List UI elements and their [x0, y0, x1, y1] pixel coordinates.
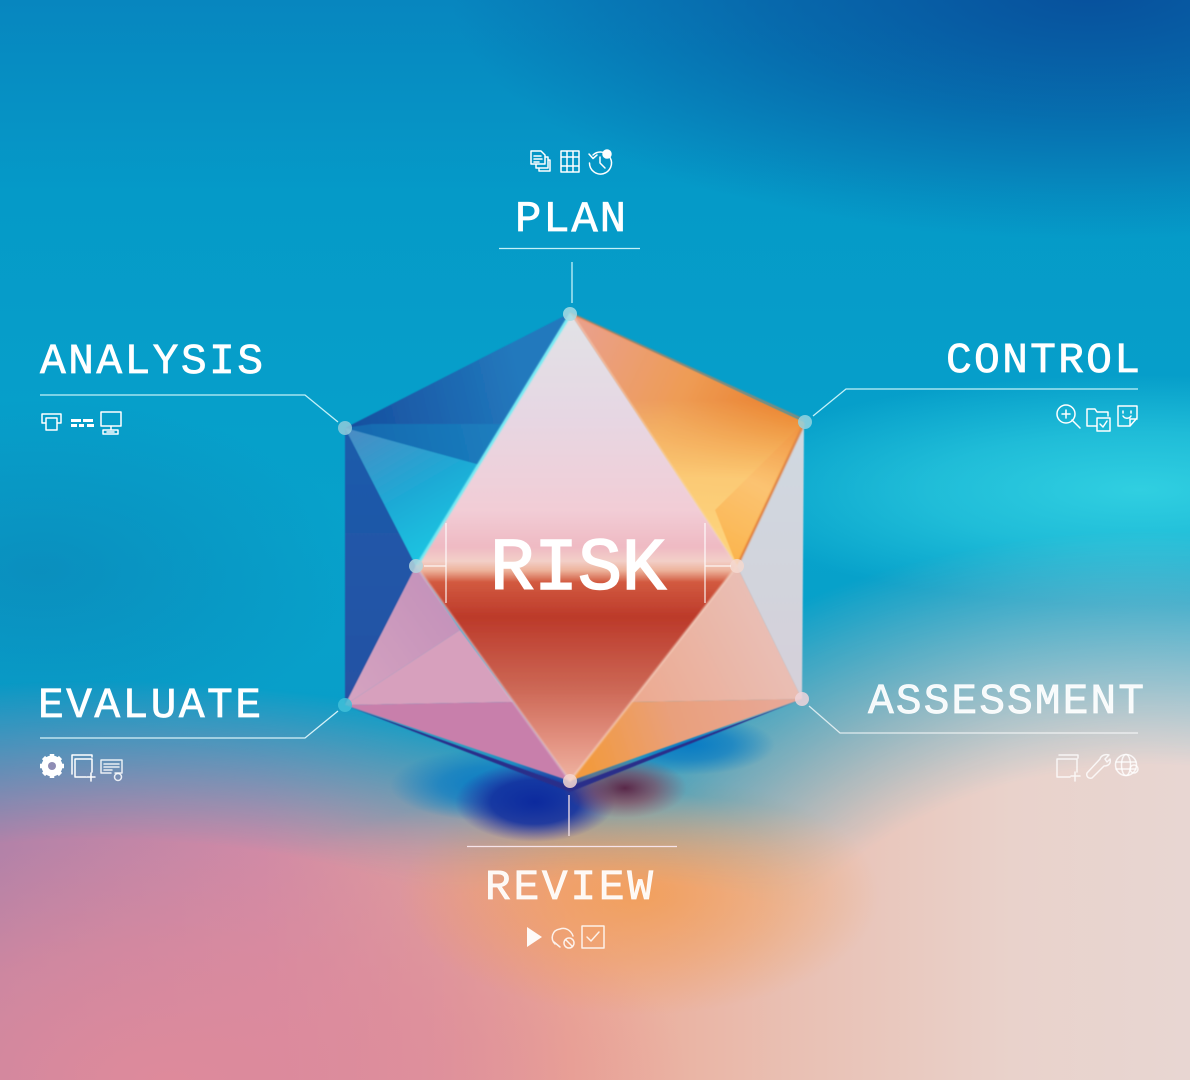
label: ASSESSMENT	[868, 677, 1144, 726]
label: CONTROL	[946, 336, 1140, 385]
icon: copy add	[1057, 755, 1080, 781]
facet: upper left	[345, 313, 570, 465]
title: RISK: RISK	[490, 528, 667, 612]
connector	[813, 389, 1138, 416]
facet: central rhombus	[416, 313, 737, 781]
icon: history clock	[589, 150, 611, 174]
icon: network	[71, 419, 94, 427]
label: REVIEW	[485, 863, 653, 912]
facet: left strip	[345, 428, 416, 705]
label: ANALYSIS	[40, 337, 263, 386]
icon: gear	[40, 754, 64, 778]
edge highlights	[416, 313, 804, 781]
node: REVIEW	[467, 795, 677, 948]
background warm lower area	[0, 540, 1190, 1080]
connector	[499, 248, 640, 303]
icon: desktop	[101, 412, 121, 434]
vertex nodes	[338, 307, 812, 788]
node: EVALUATE	[38, 681, 338, 781]
facet: upper left inner	[345, 428, 480, 566]
icon: wrench	[1087, 755, 1110, 778]
facet: right strip	[737, 422, 804, 699]
icon: zoom	[1057, 405, 1080, 428]
icon: copy add	[72, 755, 95, 781]
facet: upper right	[570, 313, 804, 566]
icon: sticky note	[1118, 406, 1137, 426]
node: ASSESSMENT	[809, 677, 1144, 781]
facet: upper right yellow glow	[570, 313, 804, 566]
label: PLAN	[515, 195, 626, 245]
connector	[40, 711, 338, 738]
shadow under polyhedron	[390, 715, 775, 842]
icon: checkbox	[582, 926, 604, 948]
connector	[40, 395, 338, 422]
icon: keyboard settings	[101, 760, 122, 780]
icon: windows	[42, 414, 61, 430]
label: EVALUATE	[38, 681, 261, 730]
title: RISK	[424, 523, 731, 612]
icon: folder check	[1087, 409, 1110, 431]
connector	[467, 795, 677, 846]
facet: lower left mid	[345, 630, 513, 705]
facet: upper right inner	[715, 422, 804, 566]
icon: refresh blocked	[552, 928, 574, 948]
facet: base edge	[345, 699, 802, 792]
polyhedron	[345, 313, 804, 792]
facet: lower right	[631, 566, 802, 702]
icon: documents	[531, 151, 550, 171]
facet: lower right base	[570, 699, 802, 781]
connector	[809, 706, 1138, 733]
icon: table	[561, 151, 579, 172]
facet: lower left base	[345, 702, 570, 781]
facet: upper left tint band	[345, 424, 503, 465]
right bracket	[705, 523, 731, 603]
left bracket	[424, 523, 446, 603]
icon: play	[527, 927, 542, 947]
node: PLAN	[499, 150, 640, 303]
icon: globe settings	[1116, 754, 1138, 776]
node: CONTROL	[813, 336, 1140, 431]
node: ANALYSIS	[40, 337, 338, 434]
facet: lower left upper	[345, 566, 460, 705]
